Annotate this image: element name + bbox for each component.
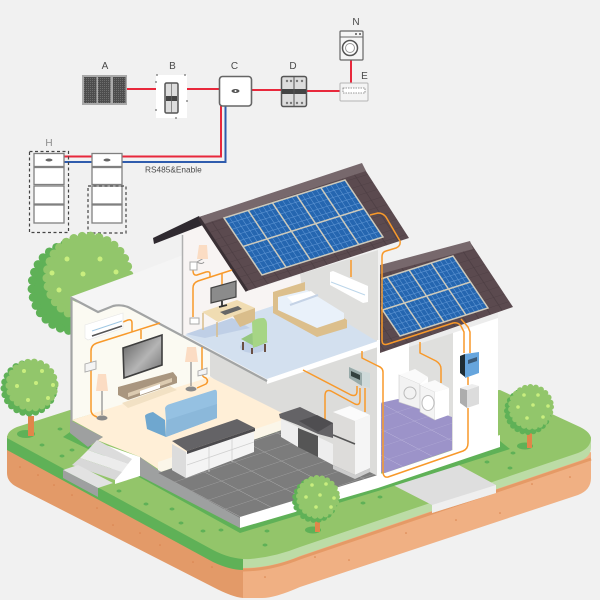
kitchen circuits xyxy=(303,370,365,420)
component letter labels: D xyxy=(289,61,297,72)
roof to inverter cable xyxy=(370,213,470,353)
main roof xyxy=(153,163,409,291)
ridge xyxy=(199,163,366,224)
left tree xyxy=(4,362,55,438)
upper floor blue xyxy=(185,296,378,379)
component N: washing machine load xyxy=(340,31,363,60)
bedroom lamp and switch xyxy=(190,245,208,270)
section outline grey xyxy=(72,298,267,421)
left eave xyxy=(153,216,203,244)
bedroom wall post xyxy=(182,235,184,337)
kitchen counter xyxy=(279,407,333,465)
soil speckles xyxy=(19,466,571,578)
walkway xyxy=(393,464,496,513)
distribution box xyxy=(349,367,370,388)
front tree xyxy=(295,478,337,534)
inverter to distribution cable xyxy=(362,351,468,477)
bedroom socket xyxy=(190,318,199,324)
orange wiring xyxy=(91,213,470,477)
ground island xyxy=(7,390,591,598)
bedroom left wall xyxy=(183,222,303,335)
component C: inverter xyxy=(220,76,252,106)
right wing outer wall xyxy=(453,312,498,459)
roof surface xyxy=(380,242,513,353)
green chair xyxy=(240,318,268,354)
central pillar xyxy=(377,340,381,478)
lower cream wall xyxy=(72,300,210,420)
tile floor side xyxy=(140,457,240,528)
roof left edge xyxy=(199,218,247,291)
bed xyxy=(273,282,347,337)
component letter labels: B xyxy=(169,61,176,72)
laundry circuit xyxy=(420,342,441,383)
right wing solar panels xyxy=(365,256,488,336)
front white wall base xyxy=(378,435,500,488)
bedroom circuits xyxy=(193,260,351,317)
dryer xyxy=(399,369,428,409)
kitchen island xyxy=(172,419,255,478)
walkway edge xyxy=(432,485,496,513)
battery stack second xyxy=(92,154,122,223)
soil left face xyxy=(7,445,243,598)
upper gable outer wall xyxy=(70,240,183,345)
component B: DC breaker xyxy=(156,75,187,118)
washing machine xyxy=(420,380,449,420)
living room circuits xyxy=(91,320,208,417)
left floor lamp xyxy=(96,374,108,420)
right floor lamp xyxy=(185,347,198,392)
tv stand xyxy=(118,372,177,408)
wall inverter blue xyxy=(460,352,479,378)
dark grass lip xyxy=(7,436,243,570)
computer monitor xyxy=(211,281,236,307)
component letter labels: C xyxy=(231,61,238,72)
component E: distribution box xyxy=(340,83,368,101)
refrigerator xyxy=(333,406,370,479)
steps xyxy=(63,440,140,497)
component letter labels: H xyxy=(45,138,53,149)
dashed optional battery outlines xyxy=(30,152,126,233)
tile floor white edge xyxy=(240,475,378,528)
cable: red and blue links xyxy=(64,60,351,162)
house xyxy=(63,222,500,528)
main solar panels xyxy=(224,180,383,275)
grey foundation xyxy=(70,420,103,447)
RS485 label: RS485&Enable xyxy=(145,164,202,174)
component A: solar array xyxy=(82,75,127,105)
grass speckles xyxy=(40,428,516,546)
laundry back wall xyxy=(409,325,453,452)
component letter labels: A xyxy=(102,61,109,72)
grass top xyxy=(7,390,591,559)
laundry purple floor xyxy=(380,399,452,473)
dark soil seam xyxy=(243,459,591,570)
living room air conditioner xyxy=(85,313,123,340)
bedroom back wall xyxy=(300,250,378,345)
roof surface xyxy=(199,165,409,291)
desk xyxy=(186,300,255,338)
component letter labels: N xyxy=(352,17,360,28)
big tree behind house xyxy=(32,236,129,331)
wiring diagram xyxy=(30,17,368,233)
component D: AC breaker xyxy=(282,76,306,106)
wall switches xyxy=(85,361,207,376)
wall battery box xyxy=(460,384,479,408)
television xyxy=(123,335,162,378)
component letter labels: E xyxy=(361,71,368,82)
right wing back wall xyxy=(380,340,410,405)
battery stack H xyxy=(34,154,64,223)
grass edging near house xyxy=(63,432,510,533)
upper floor white edge xyxy=(267,341,378,384)
light grass lip xyxy=(243,437,591,568)
soil right face xyxy=(243,452,591,598)
cream living floor xyxy=(72,377,282,469)
living floor front edge xyxy=(158,420,282,473)
blue sofa xyxy=(145,390,217,437)
air conditioner upper xyxy=(330,271,368,303)
kitchen tile floor xyxy=(158,430,378,518)
ridge xyxy=(380,241,473,274)
right wing upper band xyxy=(409,312,498,347)
second roof xyxy=(380,241,513,353)
kitchen back wall xyxy=(210,342,377,476)
right tree xyxy=(507,387,551,450)
component letter labels xyxy=(45,17,368,149)
